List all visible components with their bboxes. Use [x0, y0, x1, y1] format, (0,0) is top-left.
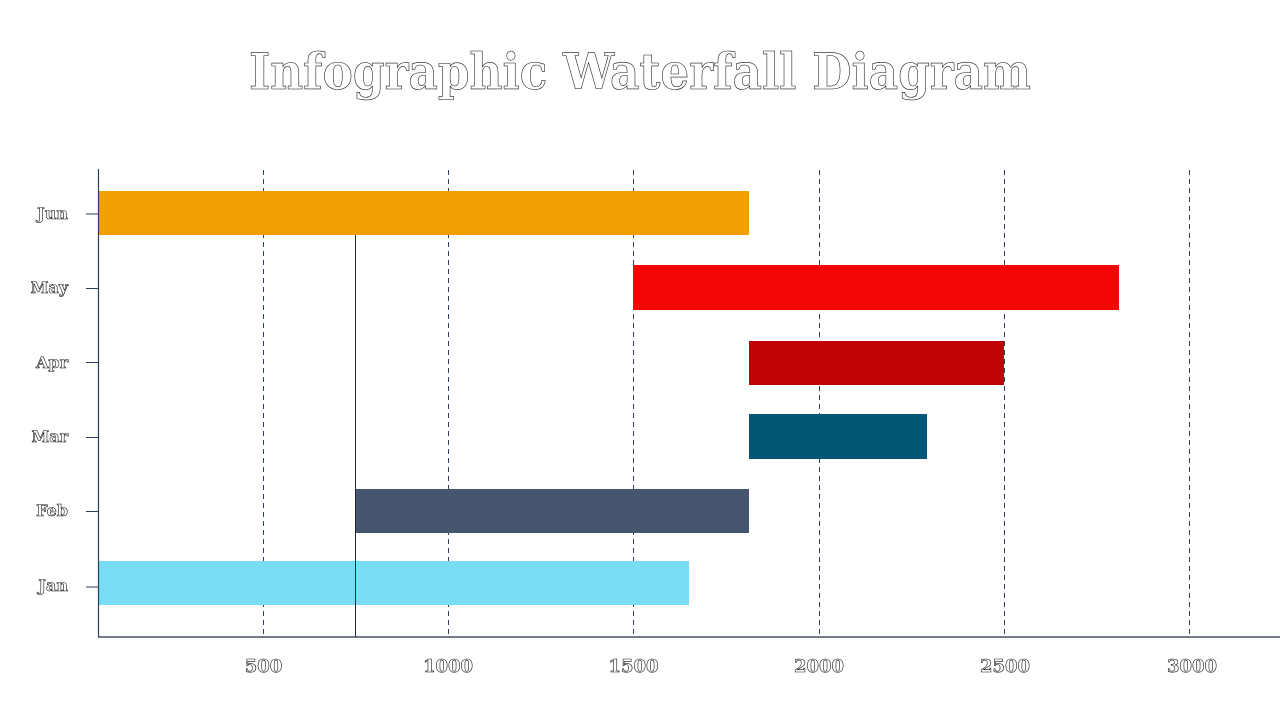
y axis labels: Jun	[35, 204, 68, 223]
bar chart	[86, 169, 1280, 637]
bar: May	[633, 265, 1119, 310]
y axis ticks	[86, 214, 98, 587]
x axis labels: 1500	[608, 656, 659, 677]
y axis labels: Feb	[36, 501, 68, 520]
y axis labels: Apr	[35, 353, 69, 372]
bar: Feb	[355, 489, 749, 533]
y axis labels: Jan	[36, 576, 68, 595]
bar: Apr	[749, 341, 1004, 385]
x axis labels: 500	[245, 656, 282, 677]
bar: Jun	[98, 191, 749, 235]
bar: Mar	[749, 414, 927, 459]
x axis labels: 2000	[794, 656, 844, 677]
x axis labels	[245, 656, 1217, 677]
connector line	[354, 235, 356, 637]
title: Infographic Waterfall Diagram	[249, 42, 1031, 101]
x axis labels: 1000	[423, 656, 473, 677]
x axis labels: 3000	[1167, 656, 1217, 677]
x axis labels: 2500	[980, 656, 1030, 677]
y axis labels: Mar	[31, 427, 69, 446]
y axis	[98, 169, 100, 637]
bar: Jan	[98, 561, 689, 605]
x axis	[98, 636, 1280, 638]
y axis labels	[31, 204, 69, 595]
y axis labels: May	[31, 278, 69, 297]
